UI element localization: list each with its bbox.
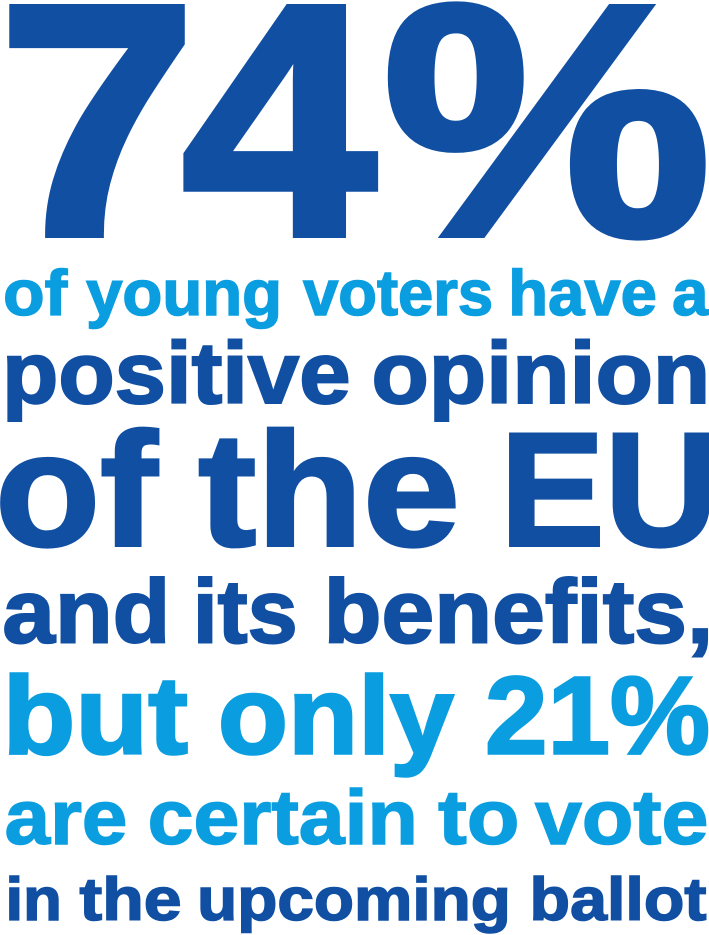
text line: are certain to vote [5, 775, 708, 861]
text line: but only 21%: only [218, 654, 454, 778]
text line: in the upcoming ballot: ballot [530, 866, 706, 933]
text line: but only 21%: but [3, 654, 188, 778]
text line: of the EU: the [198, 400, 460, 580]
text line: of young voters have a: a [672, 257, 709, 329]
headline statistic: 74% [0, 0, 709, 304]
text line: in the upcoming ballot [6, 866, 706, 933]
text line: are certain to vote: vote [535, 775, 708, 861]
text line: of young voters have a: of [3, 257, 68, 329]
text line: of young voters have a: voters [303, 257, 493, 329]
text line: and its benefits,: its [193, 562, 298, 662]
text line: are certain to vote: certain [148, 775, 418, 861]
text line: of young voters have a: young [86, 257, 282, 329]
text line: in the upcoming ballot: in [6, 866, 62, 933]
text line: in the upcoming ballot: the [80, 866, 182, 933]
text line: are certain to vote: to [438, 775, 519, 861]
text line: and its benefits, [2, 562, 709, 662]
text line: and its benefits,: benefits, [324, 562, 709, 662]
text line: positive opinion: opinion [372, 325, 709, 422]
text line: and its benefits,: and [2, 562, 170, 662]
text line: positive opinion [2, 325, 709, 422]
text line: are certain to vote: are [5, 775, 127, 861]
text line: positive opinion: positive [2, 325, 350, 422]
text line: in the upcoming ballot: upcoming [197, 866, 511, 933]
text line: of young voters have a [3, 257, 709, 329]
text line: but only 21% [3, 654, 709, 778]
text line: of the EU [0, 400, 709, 580]
text line: but only 21%: 21% [485, 654, 709, 778]
text line: of young voters have a: have [508, 257, 657, 329]
